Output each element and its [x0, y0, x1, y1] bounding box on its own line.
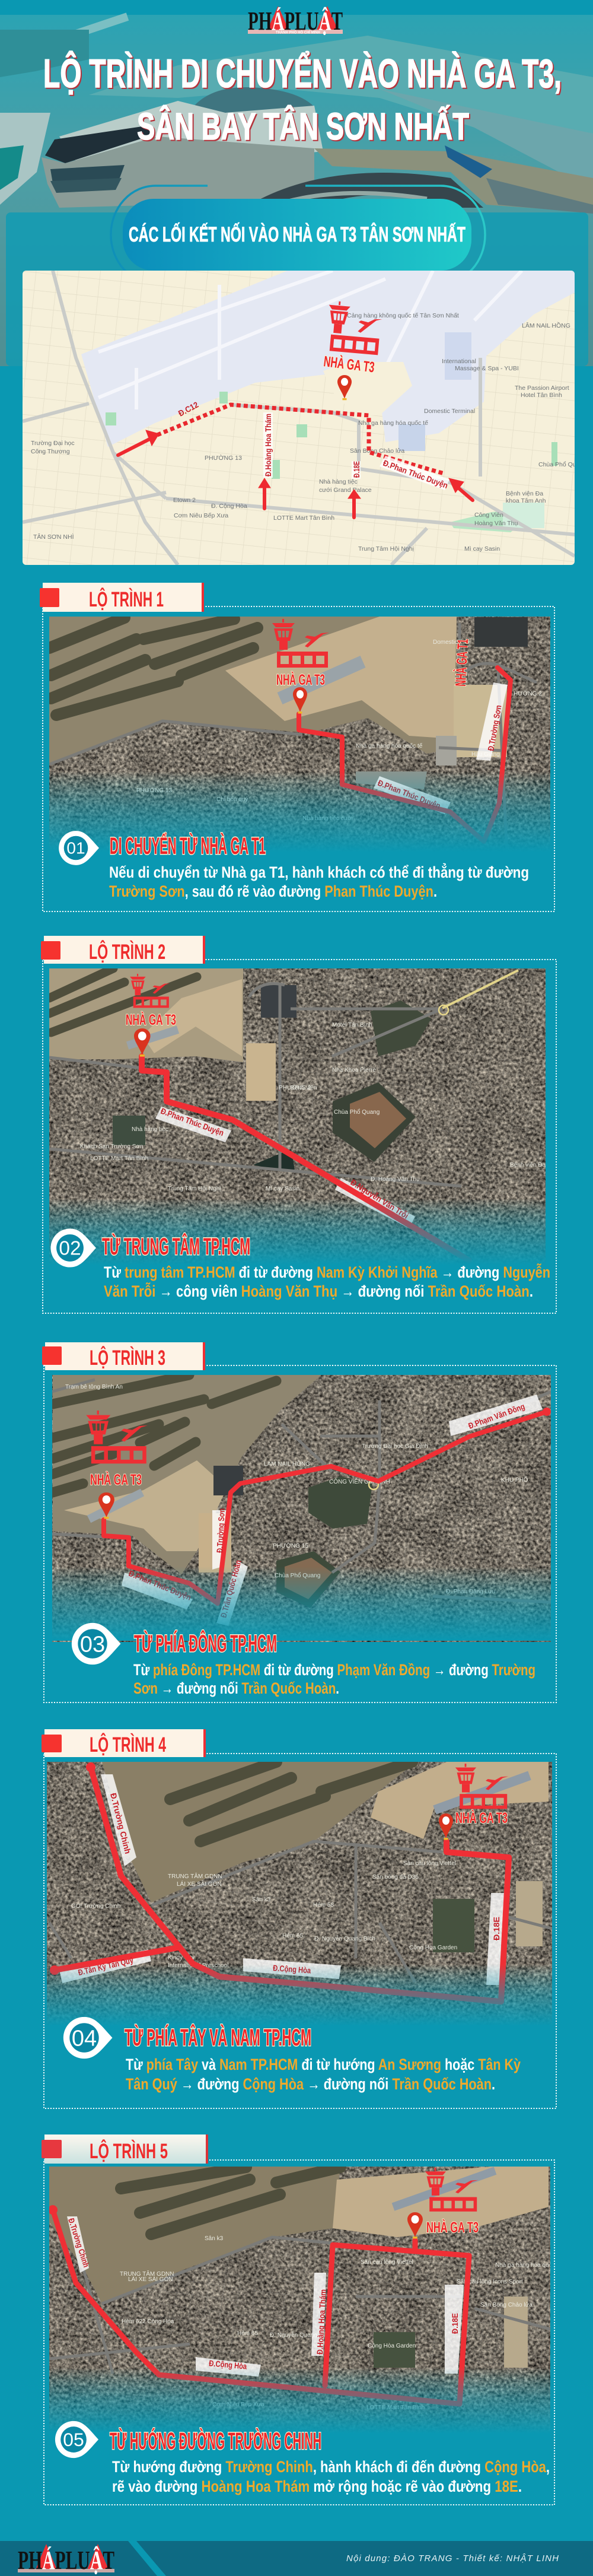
panel: route 2 [41, 936, 556, 1313]
route 5 satellite map: Đ.Cộng Hòa [209, 2358, 247, 2371]
panel: route 1 [40, 583, 554, 911]
route 2 heading: TỪ TRUNG TÂM TP.HCM [102, 1233, 250, 1260]
route 1 satellite map: NHÀ GA T1 [452, 639, 471, 687]
route 3 number badge: 03 [80, 1632, 105, 1657]
overview street map: Đ. Cộng Hòa [211, 503, 247, 510]
overview street map: PHƯỜNG 13 [205, 454, 242, 462]
route 3 text [133, 1661, 535, 1697]
route 3 satellite map: Đ.Trần Quốc Hoàn [218, 1559, 243, 1619]
route 4 satellite map: GO! Trường Chinh [71, 1903, 120, 1910]
route 3 satellite map: Đ. Phan Đăng Lưu [446, 1589, 495, 1595]
route 5 frame [44, 2160, 554, 2505]
subtitle pill [111, 186, 485, 285]
route 5 satellite map [48, 2167, 562, 2434]
route 2 satellite map: Nhà hàng tiệc [132, 1126, 168, 1133]
credits: Nội dung: ĐÀO TRANG - Thiết kế: NHẬT LINH [346, 2553, 559, 2564]
overview street map: Nhà ga hàng hóa quốc tế [358, 420, 428, 427]
map road labels [177, 400, 449, 490]
route 5 satellite map: Đ.18E [450, 2313, 460, 2334]
route 4 satellite map: Đ.18E [492, 1917, 501, 1940]
map road labels: Đ.18E [352, 461, 361, 478]
route 4 satellite map: Sân bóng đá D36 [372, 1874, 419, 1881]
route 1 heading: DI CHUYỂN TỪ NHÀ GA T1 [110, 831, 266, 859]
overview street map: Hoàng Văn Thụ [474, 520, 518, 527]
route 2 text: Văn Trỗi → công viên Hoàng Văn Thụ → đường nối Trần Quốc Hoàn. [104, 1282, 533, 1300]
footer [0, 2541, 593, 2576]
route 4 satellite map: Sân k3 [252, 1897, 271, 1903]
route 5 tab [42, 2135, 208, 2164]
route 2 text: Từ trung tâm TP.HCM đi từ đường Nam Kỳ Khởi Nghĩa → đường Nguyễn [104, 1263, 550, 1281]
overview street map: Sân Bóng Chảo lửa [350, 447, 404, 455]
route 4 satellite map: Kindy City [168, 1955, 195, 1961]
route 5 satellite map: Sân k3 [205, 2235, 224, 2242]
route 4 number badge: 04 [72, 2026, 97, 2051]
route 2 satellite map: Khách Sạn Trường Sơn [80, 1144, 144, 1150]
route 3 path [104, 1412, 547, 1603]
route 3 text: Từ phía Đông TP.HCM đi từ đường Phạm Văn Đồng → đường Trường [133, 1661, 535, 1679]
route 2 satellite map: Motel Tân Bình [332, 1022, 372, 1028]
route 2 satellite map: Đ.Phan Thúc Duyện [160, 1106, 225, 1138]
route 1 satellite map: Đ.Phan Thúc Duyện [377, 778, 442, 811]
overview street map: Trường Đại học [31, 440, 75, 447]
route 5 satellite map: Sân Bóng Chảo lửa [480, 2301, 533, 2308]
route 5 satellite map: NHÀ GA T3 [426, 2219, 479, 2236]
logo: Pháp Luật: PHÁPLUẬT [248, 7, 343, 36]
route 3 satellite map: Chùa Phổ Quang [275, 1572, 320, 1579]
route 3 satellite map: KHU PHỐ [501, 1475, 528, 1484]
route 2 satellite map: Mì cay Sasin [266, 1186, 299, 1192]
route 2 satellite map: Trung Tâm Hội Nghị [168, 1186, 221, 1192]
terminal T3 marker: NHÀ GA T3 [323, 352, 375, 376]
route 5 text: rẽ vào đường Hoàng Hoa Thám mở rộng hoặc rẽ vào đường 18E. [112, 2477, 522, 2495]
panel: route 4 [42, 1729, 556, 2108]
route 2 satellite map: LOTTE Mart Tân Bình [90, 1155, 148, 1162]
route 4 satellite map: NHÀ GA T3 [455, 1809, 508, 1827]
route 3 satellite map: Đ.Phan Thúc Duyện [127, 1568, 193, 1602]
arrows [118, 430, 473, 517]
route 3 heading: TỪ PHÍA ĐÔNG TP.HCM [134, 1630, 277, 1657]
route 1 text [109, 862, 529, 900]
route 4 satellite map: Đ.Tân Kỳ Tân Quý [77, 1955, 134, 1977]
route 5 satellite map: LÁI XE SÀI GÒN [128, 2275, 173, 2283]
route 3 frame [44, 1365, 556, 1702]
overview street map: Cảng hàng không quốc tế Tân Sơn Nhất [347, 312, 459, 319]
overview street map: cưới Grand Palace [319, 487, 372, 494]
route 3 satellite map: Đ.Phạm Văn Đồng [467, 1402, 526, 1431]
route 1 satellite map: Chỉ bốn quý [216, 796, 248, 803]
route 4 tab [42, 1729, 206, 1757]
map road labels: Đ.Phan Thúc Duyện [382, 458, 449, 490]
route 5 satellite map: Đ. Nguyễn Quang [270, 2331, 317, 2339]
route 4 text [126, 2056, 521, 2093]
title: SÂN BAY TÂN SƠN NHẤT [137, 104, 469, 148]
overview street map: Hotel Tân Bình [521, 392, 562, 399]
route 4 satellite map: Đ.Trường Chinh [109, 1792, 133, 1855]
route 3 satellite map: PHƯỜNG 15 [273, 1542, 308, 1549]
route 5 satellite map: TRUNG TÂM GDNN [120, 2270, 174, 2278]
overview street map [23, 271, 590, 565]
terminal T3 marker [323, 300, 383, 400]
route 5 text [112, 2458, 550, 2495]
route 1 satellite map: Nhà ga hàng hóa quốc tế [356, 742, 423, 749]
route 2 satellite map: Đ. Hoàng Văn Thụ [371, 1176, 420, 1183]
route 5 satellite map: LOTTE Mart Tân Bình [366, 2405, 425, 2411]
route 2 satellite map: Chùa Phổ Quang [334, 1108, 380, 1116]
route 1 satellite map: PHƯỜNG 13 [136, 786, 172, 794]
route 3 satellite map: CÔNG VIÊN GIA ĐỊNH [329, 1478, 390, 1485]
route 1 satellite map: Domestic [433, 639, 458, 646]
overview street map: Chùa Phổ Quang [538, 461, 586, 468]
route 1 frame [43, 606, 554, 911]
route 3 text: Sơn → đường nối Trần Quốc Hoàn. [133, 1679, 339, 1697]
route 5 satellite map: Hẻm 622 Cộng Hòa [122, 2318, 174, 2325]
overview street map: LÂM NAIL HỒNG [522, 322, 570, 329]
route 4 satellite map: Đ.Cộng Hòa [273, 1963, 311, 1975]
route 2 tab [41, 936, 205, 964]
route 4 satellite map [47, 1762, 552, 2026]
route 2 number badge [50, 1228, 96, 1268]
overview street map: Massage & Spa - YUBI [455, 365, 519, 372]
route 4 satellite map: Hẻm 65 [282, 1933, 303, 1939]
route 5 satellite map: Đ.Hoàng Hoa Thám [315, 2289, 328, 2355]
map road labels: Đ.Hoàng Hoa Thám [263, 414, 273, 477]
route 3 satellite map: Trường Đại học Gia Định [362, 1443, 428, 1450]
route 2 tab: LỘ TRÌNH 2 [89, 940, 165, 964]
panel: route 5: TỪ HƯỚNG ĐƯỜNG TRƯỜNG CHINH [110, 2427, 321, 2454]
route 1 satellite map [49, 617, 550, 855]
route 1 satellite map: HƯỜNG 2 [514, 690, 542, 697]
route 5 satellite map: Cơm Niêu Bếp Xưa [212, 2401, 264, 2408]
route 5 text: Từ hướng đường Trường Chinh, hành khách đi đến đường Cộng Hòa, [112, 2458, 550, 2476]
logo: Pháp Luật: THÀNH PHỐ HỒ CHÍ MINH [276, 30, 320, 34]
route 2 satellite map [49, 968, 546, 1265]
route 4 frame [44, 1754, 556, 2108]
route 5 satellite map: Sân cầu lông Icons Sport [457, 2278, 523, 2285]
route 2 frame [43, 960, 556, 1313]
route 5 satellite map: Hẻm 65 [237, 2330, 258, 2337]
route 1 tab: LỘ TRÌNH 1 [89, 587, 164, 611]
overview street map: Bệnh viện Đa [506, 490, 543, 497]
route 3 satellite map: LAM NAIL HỒNG [264, 1460, 310, 1468]
overview street map: Mì cay Sasin [464, 545, 500, 552]
route 1 number badge [59, 831, 99, 865]
route 2 satellite map: PHƯỜNG 2 [279, 1084, 311, 1091]
route 4 satellite map: LÁI XE SÀI GÒN [177, 1880, 222, 1888]
route 1 number badge: 01 [66, 838, 85, 857]
route 2 satellite map: NHÀ GA T3 [126, 1011, 176, 1028]
route 1 satellite map: Nhà hàng tiệc cưới [302, 815, 353, 822]
route 5 satellite map: Cộng Hòa Garden [368, 2343, 416, 2349]
route 4 path [55, 1767, 509, 2002]
overview street map: Công Thương [31, 448, 70, 455]
route 5 satellite map: Sân cầu lông Viettel [361, 2259, 413, 2266]
route 5 satellite map: Nhà ga hàng hóa quốc tế [495, 2261, 562, 2269]
route 3 satellite map [52, 1375, 551, 1642]
route 4 text: Từ phía Tây và Nam TP.HCM đi từ hướng An Sương hoặc Tân Kỳ [126, 2056, 521, 2073]
route 5 number badge: 05 [63, 2429, 84, 2450]
translucent section panel [6, 212, 588, 366]
route 2 satellite map: Nha Khoa Pierre [332, 1067, 376, 1073]
route 2 satellite map: Đ.Nguyễn Văn Trỗi [349, 1177, 410, 1221]
route 4 satellite map: TRUNG TÂM GDNN [168, 1872, 222, 1880]
route 1 satellite map: Đ.Trường Sơn [486, 704, 503, 752]
route 1 satellite map: NHÀ GA T3 [276, 671, 325, 688]
route 2 satellite map: Bệnh viện Đa [510, 1162, 546, 1168]
route 4 satellite map: Sân cầu lông Viettel [403, 1860, 456, 1867]
route 4 tab: LỘ TRÌNH 4 [90, 1733, 166, 1756]
panel: route 5 [42, 2135, 562, 2505]
route 4 heading: TỪ PHÍA TÂY VÀ NAM TP.HCM [125, 2024, 311, 2051]
overview street map: Trung Tâm Hội Nghị [358, 545, 414, 552]
route 5 satellite map: Đ.Trường Chinh [66, 2217, 91, 2269]
route 3 number badge [72, 1623, 121, 1665]
route 2 satellite map: Bệnh viện [291, 1085, 317, 1091]
route 1 text: Trường Sơn, sau đó rẽ vào đường Phan Thúc Duyện. [109, 882, 437, 900]
route 1 path [299, 668, 511, 841]
title [43, 50, 562, 148]
overview street map: Etown 2 [173, 497, 196, 504]
overview street map: Cơm Niêu Bếp Xưa [174, 512, 228, 519]
route 3 satellite map: Đ.Trường Sơn [215, 1508, 227, 1553]
route 2 text [104, 1263, 550, 1300]
route 4 satellite map: Đ. Nguyễn Quang Bích [314, 1935, 375, 1942]
dashed route [157, 405, 444, 474]
route 4 satellite map: Cộng Hòa Garden [409, 1945, 457, 1951]
overview street map: Domestic Terminal [424, 408, 475, 415]
hero photo: terminal T3 construction site [0, 15, 593, 366]
route 2 path [142, 1056, 469, 1260]
overview street map: Nhà hàng tiệc [319, 478, 358, 485]
route 4 number badge [63, 2017, 113, 2059]
overview street map: The Passion Airport [515, 385, 569, 392]
route 5 number badge [55, 2421, 98, 2458]
overview street map: International [442, 358, 476, 365]
overview street map: khoa Tâm Anh [506, 497, 546, 504]
route 3 tab: LỘ TRÌNH 3 [90, 1346, 165, 1370]
route 4 satellite map: International Preschool [168, 1962, 228, 1969]
overview street map: TÂN SƠN NHÌ [33, 533, 74, 541]
route 5 tab: LỘ TRÌNH 5 [90, 2139, 168, 2163]
overview street map: Công Viên [474, 512, 503, 519]
route 1 satellite map: Hậu Giang [471, 751, 500, 758]
route 4 text: Tân Quý → đường Cộng Hòa → đường nối Trần Quốc Hoàn. [126, 2075, 495, 2093]
route 5 path [53, 2210, 469, 2404]
route 3 tab [42, 1342, 205, 1370]
overview street map: LOTTE Mart Tân Bình [273, 514, 334, 522]
panel: route 3 [42, 1342, 556, 1702]
map road labels: Đ.C12 [177, 400, 200, 418]
route 1 tab [40, 583, 204, 612]
footer logo: PHÁPLUẬT [18, 2546, 114, 2575]
route 3 satellite map: NHÀ GA T3 [90, 1471, 142, 1488]
route 4 satellite map: Hẻm 58 [313, 1902, 334, 1908]
route 2 number badge: 02 [59, 1237, 81, 1259]
route 3 satellite map: Trạm bê tông Bình An [65, 1384, 123, 1390]
